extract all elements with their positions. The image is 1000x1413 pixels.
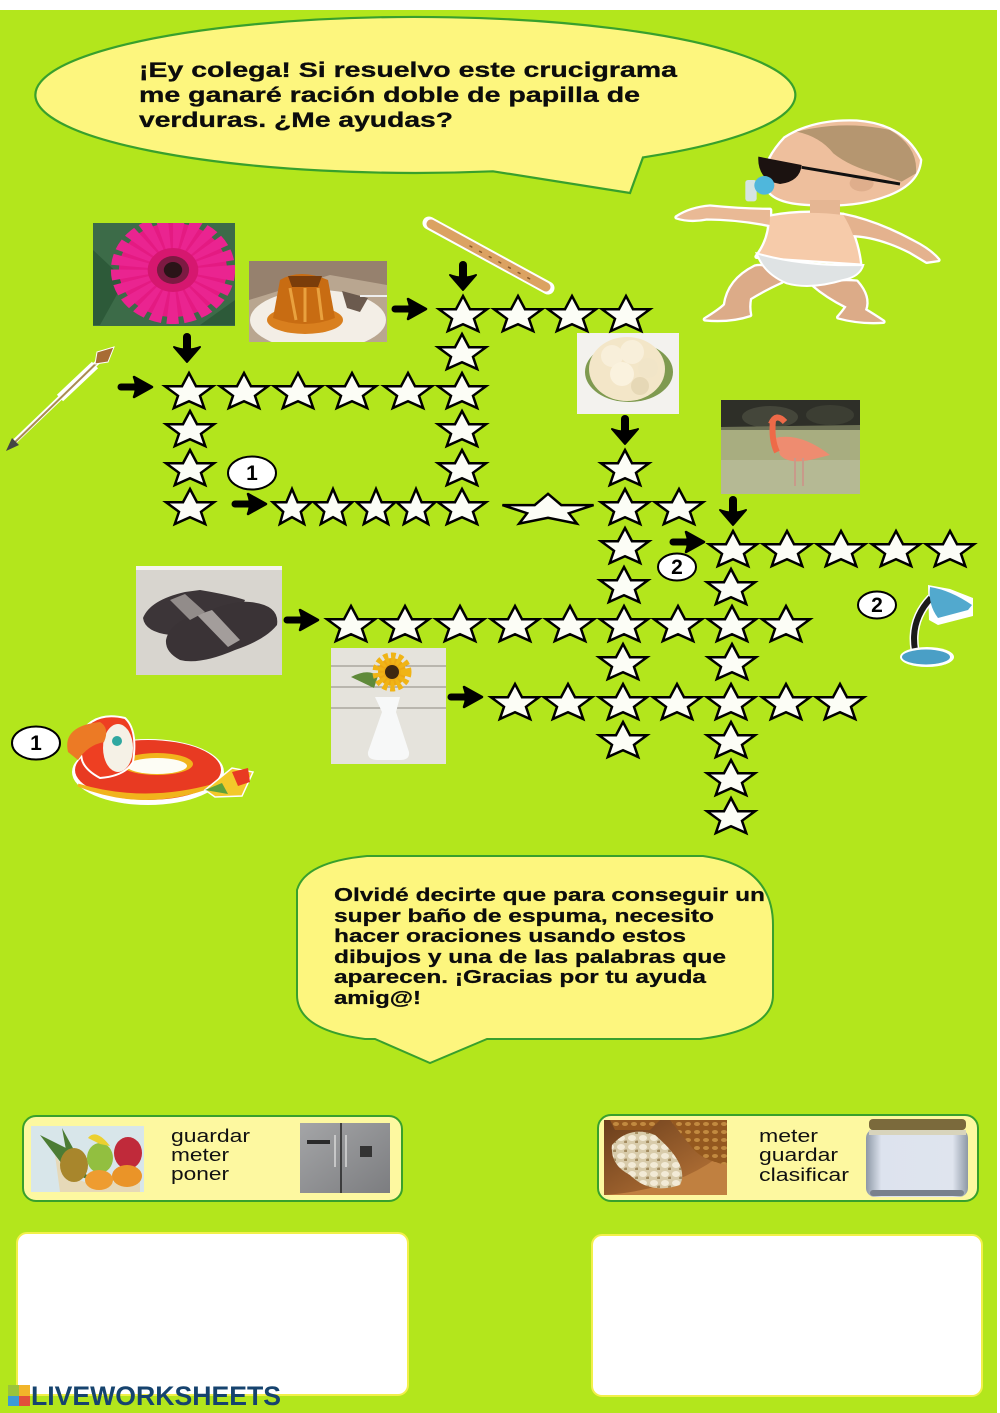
direction arrows: [121, 265, 746, 707]
photo: cauliflower: [577, 333, 679, 414]
photo: nuts on a board: [604, 1120, 727, 1195]
crossword star grid: [165, 296, 974, 833]
word list: poner: [171, 1164, 229, 1184]
logo: liveworksheets: LIVEWORKSHEETS: [31, 1381, 281, 1411]
bubble text: instructions: dibujos y una de las palabras que: [334, 947, 726, 967]
icon: parrot pool float: [67, 716, 253, 805]
photo: fridge: [300, 1123, 390, 1193]
word list: [759, 1126, 849, 1185]
bubble text: instructions: [334, 885, 765, 1008]
icon: recorder flute: [429, 223, 548, 288]
photo: sunflower in a white vase: [331, 648, 446, 764]
photo: flamingo in water: [721, 400, 860, 494]
bubble text: intro: me ganaré ración doble de papilla de: [139, 84, 640, 107]
bubble text: intro: verduras. ¿Me ayudas?: [139, 109, 453, 132]
card: fruit and fridge: [23, 1116, 402, 1201]
bubble text: instructions: Olvidé decirte que para conseguir un: [334, 885, 765, 905]
word list: meter: [171, 1145, 229, 1165]
photo: fruit bowl: [31, 1126, 144, 1192]
illustration: baby with sunglasses and pacifier: [677, 122, 938, 322]
number badges: 1: [246, 462, 258, 485]
photo: gerbera flower: [93, 223, 235, 326]
icon: blue desk lamp: [900, 585, 973, 667]
bubble text: intro: [139, 59, 677, 132]
word list: clasificar: [759, 1165, 849, 1185]
photo: slippers: [136, 566, 282, 675]
number badges: 2: [871, 594, 883, 617]
speech bubble: instructions: [297, 856, 773, 1063]
number badges: 1: [30, 732, 42, 755]
bubble text: instructions: hacer oraciones usando estos: [334, 926, 686, 946]
speech bubble: intro: [35, 17, 795, 193]
word list: guardar: [759, 1145, 838, 1165]
photo: flan on a plate: [249, 261, 388, 350]
answer box: right: [592, 1235, 982, 1396]
bubble text: intro: ¡Ey colega! Si resuelvo este crucigrama: [139, 59, 677, 82]
icon: archery arrow: [6, 347, 114, 451]
photo: glass jar: [866, 1119, 968, 1197]
bubble text: instructions: amig@!: [334, 988, 421, 1008]
answer box: left: [17, 1233, 408, 1395]
card: nuts and jar: [598, 1115, 978, 1201]
number badges: [12, 456, 896, 760]
number badges: 2: [671, 556, 683, 579]
word list: guardar: [171, 1126, 250, 1146]
word list: [171, 1126, 250, 1184]
bubble text: instructions: super baño de espuma, necesito: [334, 906, 714, 926]
word list: meter: [759, 1126, 818, 1146]
bubble text: instructions: aparecen. ¡Gracias por tu ayuda: [334, 967, 707, 987]
